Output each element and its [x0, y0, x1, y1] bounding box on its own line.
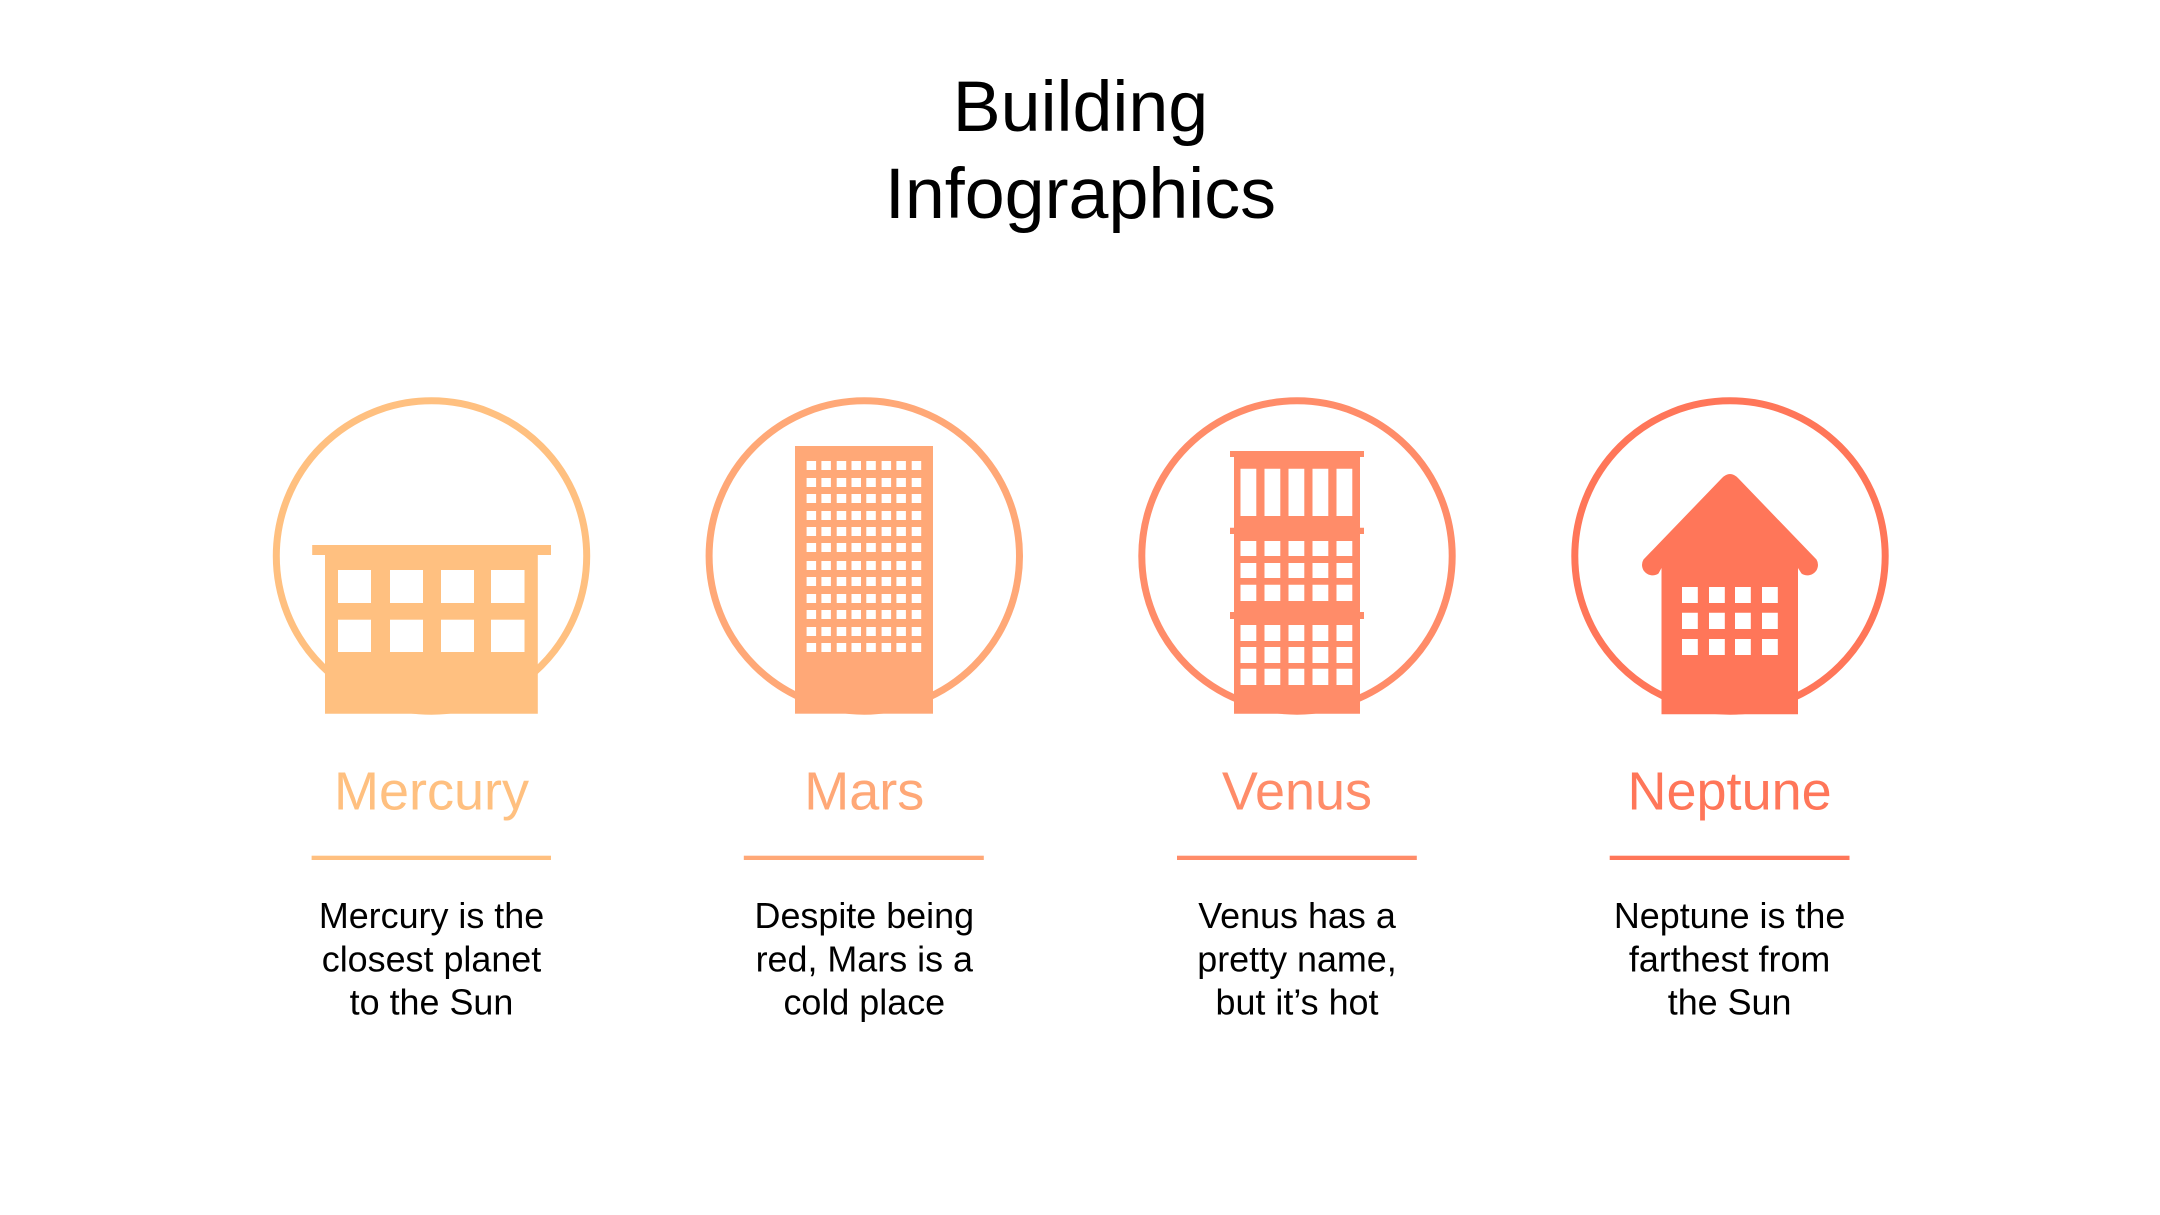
icon: Neptune building [1642, 474, 1818, 714]
text: Mars description [755, 896, 974, 1022]
text: Mars description: Despite being [755, 896, 974, 936]
text: Neptune description [1614, 896, 1845, 1022]
text: Neptune description: the Sun [1668, 982, 1791, 1022]
text: Neptune description: Neptune is the [1614, 896, 1845, 936]
icon: Mars circle [709, 401, 1020, 711]
panel: Mercury [276, 401, 587, 1022]
icon: Mercury building [312, 545, 551, 714]
title [885, 67, 1276, 234]
panel: Venus [1142, 401, 1452, 1022]
heading: Neptune: Neptune [1628, 762, 1832, 822]
divider: Mercury [312, 856, 551, 860]
text: Venus description: Venus has a [1198, 896, 1396, 936]
text: Mars description: red, Mars is a [756, 939, 973, 979]
heading: Venus: Venus [1222, 762, 1372, 822]
title: Infographics [885, 154, 1276, 234]
panel: Neptune [1575, 401, 1885, 1022]
heading: Mars: Mars [804, 762, 924, 822]
divider: Neptune [1610, 856, 1850, 860]
text: Mercury description: to the Sun [350, 982, 513, 1022]
text: Venus description: pretty name, [1197, 939, 1397, 979]
text: Venus description [1197, 896, 1397, 1022]
text: Venus description: but it’s hot [1216, 982, 1378, 1022]
text: Mercury description: closest planet [322, 939, 541, 979]
icon: Neptune circle [1575, 401, 1885, 711]
panel: Mars [709, 401, 1020, 1022]
text: Mercury description: Mercury is the [319, 896, 544, 936]
icon: Venus building [1230, 451, 1364, 714]
icon: Mars building [795, 446, 933, 714]
icon: Venus circle [1142, 401, 1452, 711]
text: Mars description: cold place [783, 982, 945, 1022]
divider: Mars [744, 856, 984, 860]
title: Building [953, 67, 1208, 147]
text: Mercury description [319, 896, 544, 1022]
heading: Mercury: Mercury [334, 762, 529, 822]
icon: Mercury circle [276, 401, 587, 711]
divider: Venus [1177, 856, 1417, 860]
text: Neptune description: farthest from [1629, 939, 1830, 979]
